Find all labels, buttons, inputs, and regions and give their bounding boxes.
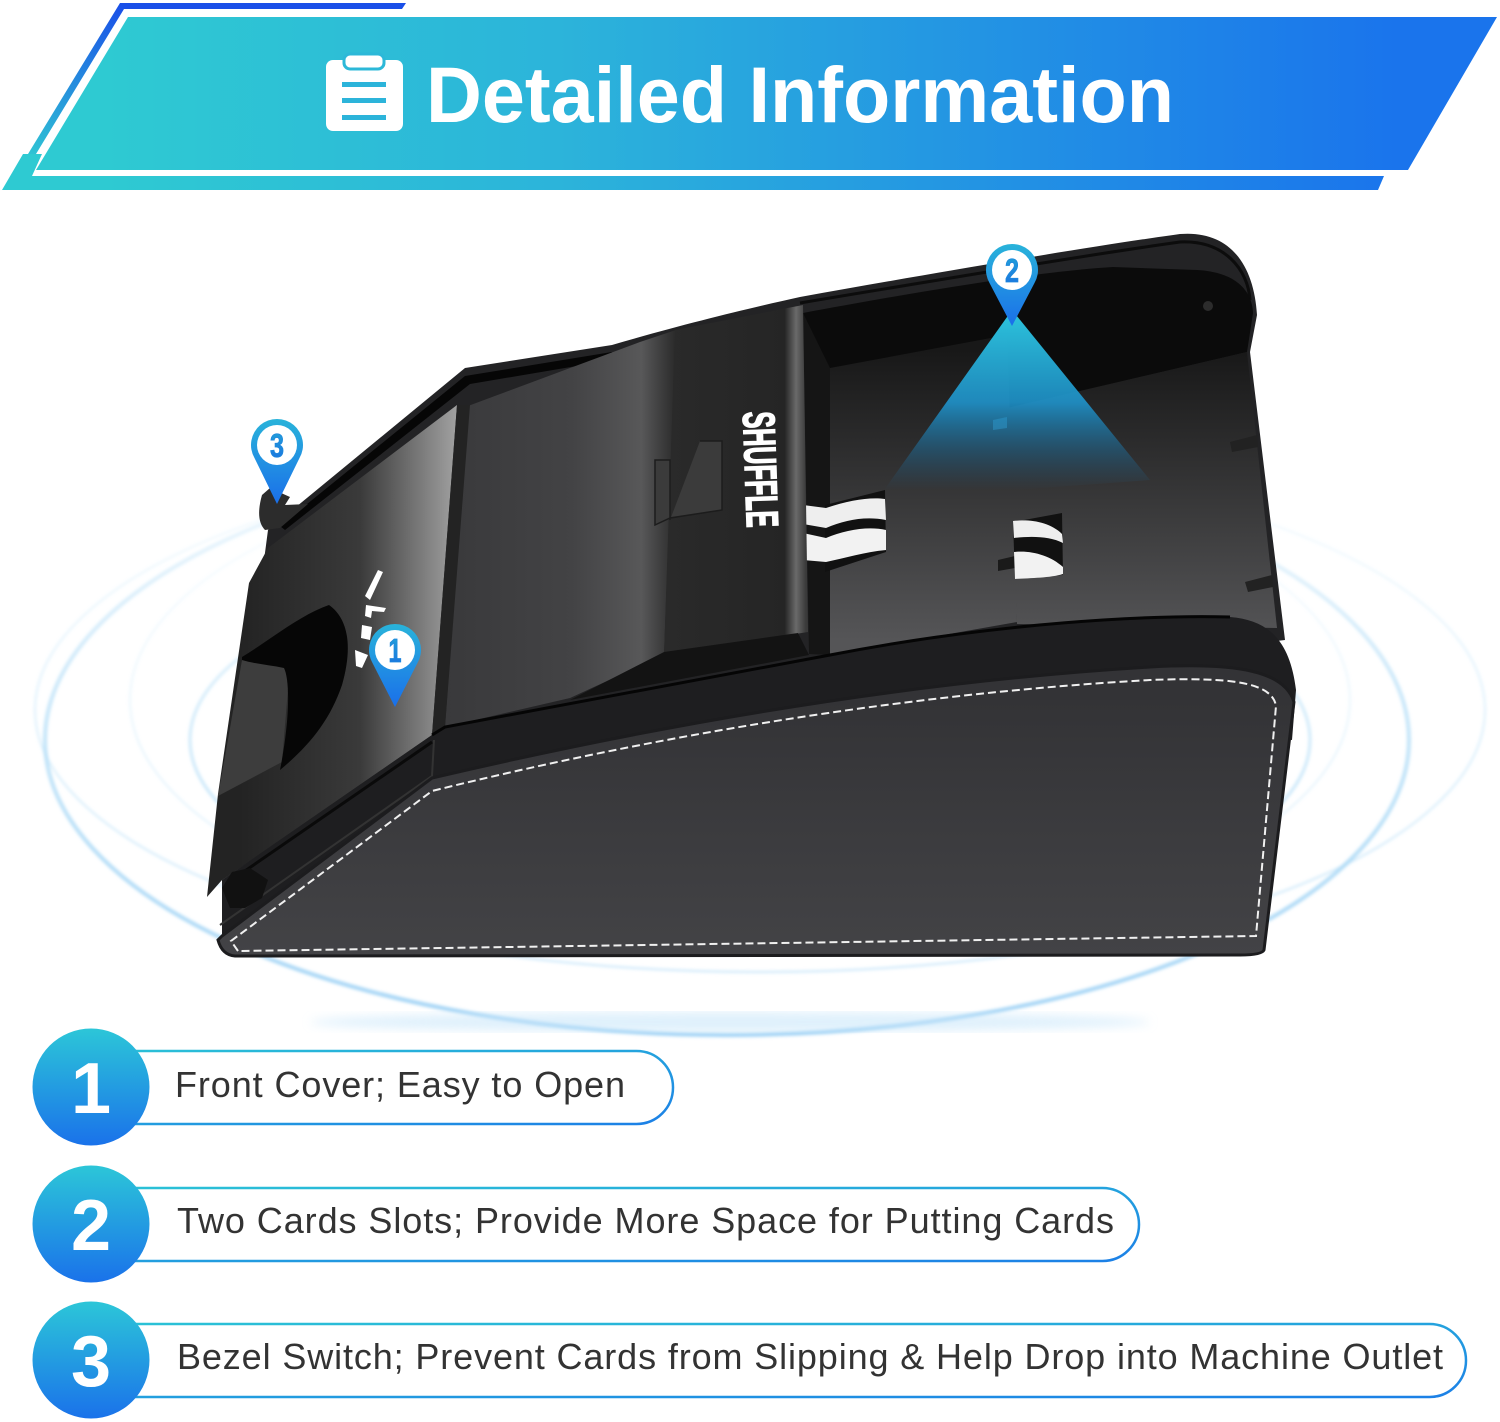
feature row 2 xyxy=(32,1166,1139,1282)
middle cover xyxy=(445,330,676,727)
icon: clipboard xyxy=(326,54,403,131)
soft glow under product xyxy=(310,1012,1150,1032)
pin 2: 2 xyxy=(1005,252,1019,289)
plate opening xyxy=(218,605,348,796)
pin 1: 1 xyxy=(388,632,402,669)
feature row 1: 1 xyxy=(71,1049,111,1129)
pin 3 xyxy=(251,419,303,504)
leather side panel xyxy=(218,666,1294,956)
concentric rings behind product xyxy=(35,445,1485,1035)
hinge xyxy=(222,868,268,908)
card slots xyxy=(803,301,1277,655)
pin 3: 3 xyxy=(270,427,284,464)
shuffler top shell xyxy=(222,234,1285,880)
shuffle section xyxy=(664,305,808,655)
feature row 2: 2 xyxy=(71,1186,111,1266)
front plate xyxy=(207,405,457,897)
title: Detailed Information xyxy=(426,50,1174,139)
pin 2 xyxy=(986,244,1038,326)
feature row 1: Front Cover; Easy to Open xyxy=(175,1064,625,1105)
clip: bezel switch xyxy=(259,488,308,530)
pin 1 xyxy=(369,624,421,707)
feature row 3 xyxy=(32,1302,1466,1418)
rim xyxy=(222,617,1296,945)
interior upper black xyxy=(803,267,1253,410)
highlight beam xyxy=(877,310,1150,500)
rollers xyxy=(803,490,1063,579)
feature row 1 xyxy=(32,1028,673,1146)
product: card shuffler xyxy=(207,234,1296,956)
latch detail xyxy=(655,441,722,525)
banner xyxy=(2,3,1497,190)
stitching xyxy=(231,679,1276,951)
plate lettering xyxy=(355,570,386,668)
feature row 3: 3 xyxy=(71,1322,111,1402)
SHUFFLE label: SHUFFLE xyxy=(733,411,788,528)
feature row 3: Bezel Switch; Prevent Cards from Slipping & Help Drop into Machine Outlet xyxy=(177,1336,1443,1377)
feature row 2: Two Cards Slots; Provide More Space for Putting Cards xyxy=(177,1200,1114,1241)
